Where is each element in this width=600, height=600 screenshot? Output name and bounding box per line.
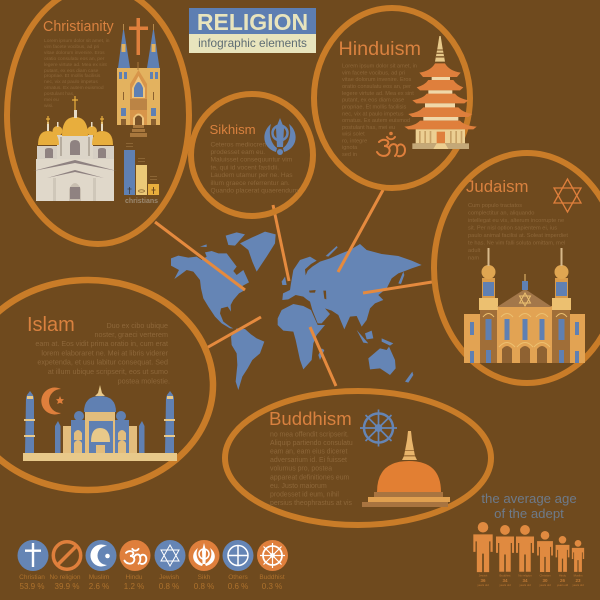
legend labels: 53.9 %	[20, 582, 44, 591]
text block: judaism: te has. Ne vim falli soluta omittam, mel	[468, 240, 565, 246]
panel: christianity	[7, 0, 189, 244]
icon: cathedral	[117, 24, 160, 137]
age labels: 34	[502, 578, 508, 583]
text block: christianity: wisi.	[44, 103, 54, 109]
text block: christianity: vim facete vocibus, ad pri	[44, 44, 99, 50]
text block: islam: at illum ubique scripserit, eos ut sumo	[48, 367, 168, 376]
text block: hinduism: sed in	[342, 152, 357, 158]
age labels: No religion	[518, 574, 532, 578]
text block: hinduism: ornatus. Ex autem euismod	[342, 118, 410, 124]
text block: hinduism: putant, ex eos diam case	[342, 98, 404, 104]
icon: stupa	[362, 431, 450, 507]
text block: hinduism: ignota	[342, 145, 358, 151]
age labels: 36	[480, 578, 486, 583]
age labels: years old	[477, 583, 489, 587]
text block: sikhism: Quando placerat quaerendum	[210, 188, 299, 194]
heading: average age: the average age	[481, 491, 577, 506]
age labels: 23	[575, 578, 581, 583]
icon: christian	[18, 540, 48, 571]
panel: average age	[473, 491, 584, 587]
text block: islam: expetenda, et usu labitur consequat. Sed	[37, 358, 168, 366]
text block: christianity: mei eu	[44, 97, 59, 103]
text block: hinduism: legere virtute ad. Mea ex sint	[342, 91, 414, 97]
text block: christianity: oratio consulatu eos an, per	[44, 56, 105, 62]
icon: latin cross	[129, 18, 148, 55]
text block: buddhism: persius theophrastus at vis	[270, 500, 353, 507]
age labels: years old	[519, 583, 531, 587]
icon: jewish	[154, 540, 186, 571]
legend labels: 2.6 %	[89, 582, 109, 591]
icon: hindu	[120, 540, 150, 571]
title: RELIGION	[197, 9, 308, 35]
text block: christianity: putant, ex eos diam case	[44, 68, 99, 74]
icon: pagoda	[404, 36, 477, 149]
icon: no religion	[53, 542, 81, 569]
text block: christianity: vitae dolorum invenire. Eros	[44, 50, 105, 56]
age labels: 34	[522, 578, 528, 583]
heading: judaism: Judaism	[466, 177, 528, 196]
world map	[171, 232, 422, 390]
text block: hinduism: vitae dolorum invenire. Eros	[342, 77, 412, 83]
legend labels: 1.2 %	[124, 582, 144, 591]
age labels: Christian	[539, 574, 551, 578]
age labels: Jewish	[479, 574, 488, 578]
text block: judaism: nam	[468, 256, 479, 262]
panel: judaism	[434, 153, 600, 383]
text block: sikhism: Laudem utamur per ne. Has	[210, 172, 293, 179]
text block: christianity: postulant has,	[44, 91, 74, 97]
icon: orthodox church	[33, 96, 117, 201]
panel: buddhism	[225, 391, 491, 525]
text block: sikhism: prodesset eam eu.	[210, 149, 265, 156]
connector lines	[155, 190, 432, 386]
pictogram: people by age	[473, 522, 584, 572]
text block: christianity: ornatus. Ex autem euismod	[44, 85, 104, 91]
legend labels: 0.8 %	[159, 582, 179, 591]
legend labels: Buddhist	[259, 574, 285, 581]
icon: synagogue	[464, 248, 585, 363]
text block: buddhism: eam an, eam eius diceret	[270, 448, 347, 456]
text block: hinduism: Lorem ipsum dolor sit amet, in	[342, 64, 417, 70]
age labels: years old	[539, 583, 551, 587]
text block: buddhism: Aliquip partiendo consulatu	[270, 440, 353, 447]
legend labels: Hindu	[126, 574, 143, 581]
text block: hinduism: oratio consulatu eos an, per	[342, 84, 411, 90]
icon: muslim	[86, 540, 116, 571]
icon: om	[377, 133, 405, 156]
legend: religion shares	[18, 540, 288, 591]
legend labels: Muslim	[89, 574, 109, 581]
subtitle: infographic elements	[198, 36, 307, 50]
icon: sikh	[188, 540, 220, 571]
text block: sikhism: Maluisset consequuntur vim	[210, 156, 293, 164]
icon: khanda	[264, 118, 296, 155]
text block: hinduism: postulant has, mei eu	[342, 125, 395, 131]
heading: islam: Islam	[27, 314, 75, 336]
text block: judaism: paulo animal facilisi at. Soleat imperdiet	[468, 233, 568, 239]
legend labels: 0.8 %	[194, 582, 214, 591]
text block: christianity: propriae. Et mollis facilisis	[44, 73, 101, 79]
text block: judaism: Cum populo tractatos	[468, 203, 522, 209]
panel: hinduism	[314, 8, 477, 188]
age labels: Hindu	[559, 574, 567, 578]
text block: hinduism: nec, vix at paulo impetus	[342, 112, 404, 118]
text block: judaism: complectitur an, aliquando	[468, 210, 534, 216]
text block: judaism: sit. Per nisl option sapientem ei, ius	[468, 226, 557, 232]
text block: judaism: adult	[468, 248, 481, 254]
icon: buddhist	[257, 540, 288, 571]
text block: sikhism: te, qui id vocent fastidii.	[210, 164, 279, 172]
text block: hinduism: vim facete vocibus, ad pri	[342, 70, 405, 76]
text block: sikhism: Ceteros mediocrem	[210, 142, 269, 148]
heading: hinduism: Hinduism	[338, 38, 421, 60]
age labels: Muslim	[574, 574, 583, 578]
text block: christianity: nec, vix at paulo impetus	[44, 79, 98, 85]
icon: dharma wheel	[360, 410, 397, 446]
text block: judaism: intellegat eu vis, alterum incorrupte ne	[468, 218, 564, 224]
age labels: Buddhist	[500, 574, 511, 578]
text block: hinduism: propriae. Et mollis facilisis	[342, 104, 407, 110]
icon: others	[222, 540, 254, 571]
age labels	[477, 574, 584, 587]
text block: islam: eam at. Eos vidit prima oratio in, cum erat	[35, 339, 168, 348]
legend labels: 39.9 %	[55, 582, 79, 591]
heading: sikhism: Sikhism	[210, 122, 256, 137]
legend labels: Jewish	[159, 574, 179, 581]
legend labels: 0.6 %	[228, 582, 248, 591]
text block: buddhism: adversarium id. Ei fuisset	[270, 457, 347, 464]
legend labels	[19, 574, 285, 591]
legend labels: Christian	[19, 574, 45, 581]
age labels: years old	[557, 583, 569, 587]
text block: buddhism: volumus pro, postea	[270, 466, 332, 472]
heading: average age: of the adept	[494, 506, 564, 521]
age labels: 26	[560, 578, 565, 583]
text block: islam: postea molestie.	[118, 376, 170, 386]
icon: star of david	[554, 179, 581, 212]
age labels: 30	[542, 578, 548, 583]
legend labels: Sikh	[198, 574, 211, 581]
text block: buddhism: no mea offendit scripserit.	[270, 432, 349, 438]
icon: taj mahal	[23, 385, 177, 461]
bar chart: christians: christians	[125, 198, 158, 205]
age labels: years old	[572, 583, 584, 587]
text block: hinduism: wisi solet	[341, 132, 365, 138]
age labels: years old	[499, 583, 511, 587]
text block: buddhism: appareat definitiones eum	[270, 474, 350, 482]
text block: christianity: Lorem ipsum dolor sit amet, in	[44, 38, 110, 44]
heading: christianity: Christianity	[43, 19, 115, 35]
text block: hinduism: ro, integre	[342, 138, 367, 144]
legend labels: Others	[228, 574, 248, 581]
bar chart: christians	[124, 143, 159, 205]
text block: islam: lorem elaboraret ne. Mei at libris viderer	[41, 348, 169, 358]
title banner	[189, 8, 316, 53]
icon: crescent and star	[41, 388, 64, 414]
panel: sikhism	[191, 94, 313, 216]
legend labels: No religion	[49, 574, 81, 581]
text block: sikhism: illum graece referrentur an.	[210, 180, 290, 187]
text block: buddhism: eu. Justo maiorum	[270, 483, 327, 490]
heading: buddhism: Buddhism	[269, 408, 352, 429]
legend labels: 0.3 %	[262, 582, 282, 591]
text block: islam: noster, graeci verterem	[94, 330, 168, 339]
text block: christianity: legere virtute ad. Mea ex sint	[44, 62, 107, 68]
text block: islam: Duo ex cibo ubique	[106, 321, 168, 330]
panel: islam	[0, 280, 213, 490]
text block: buddhism: prodesset id eum, nihil	[270, 492, 339, 498]
